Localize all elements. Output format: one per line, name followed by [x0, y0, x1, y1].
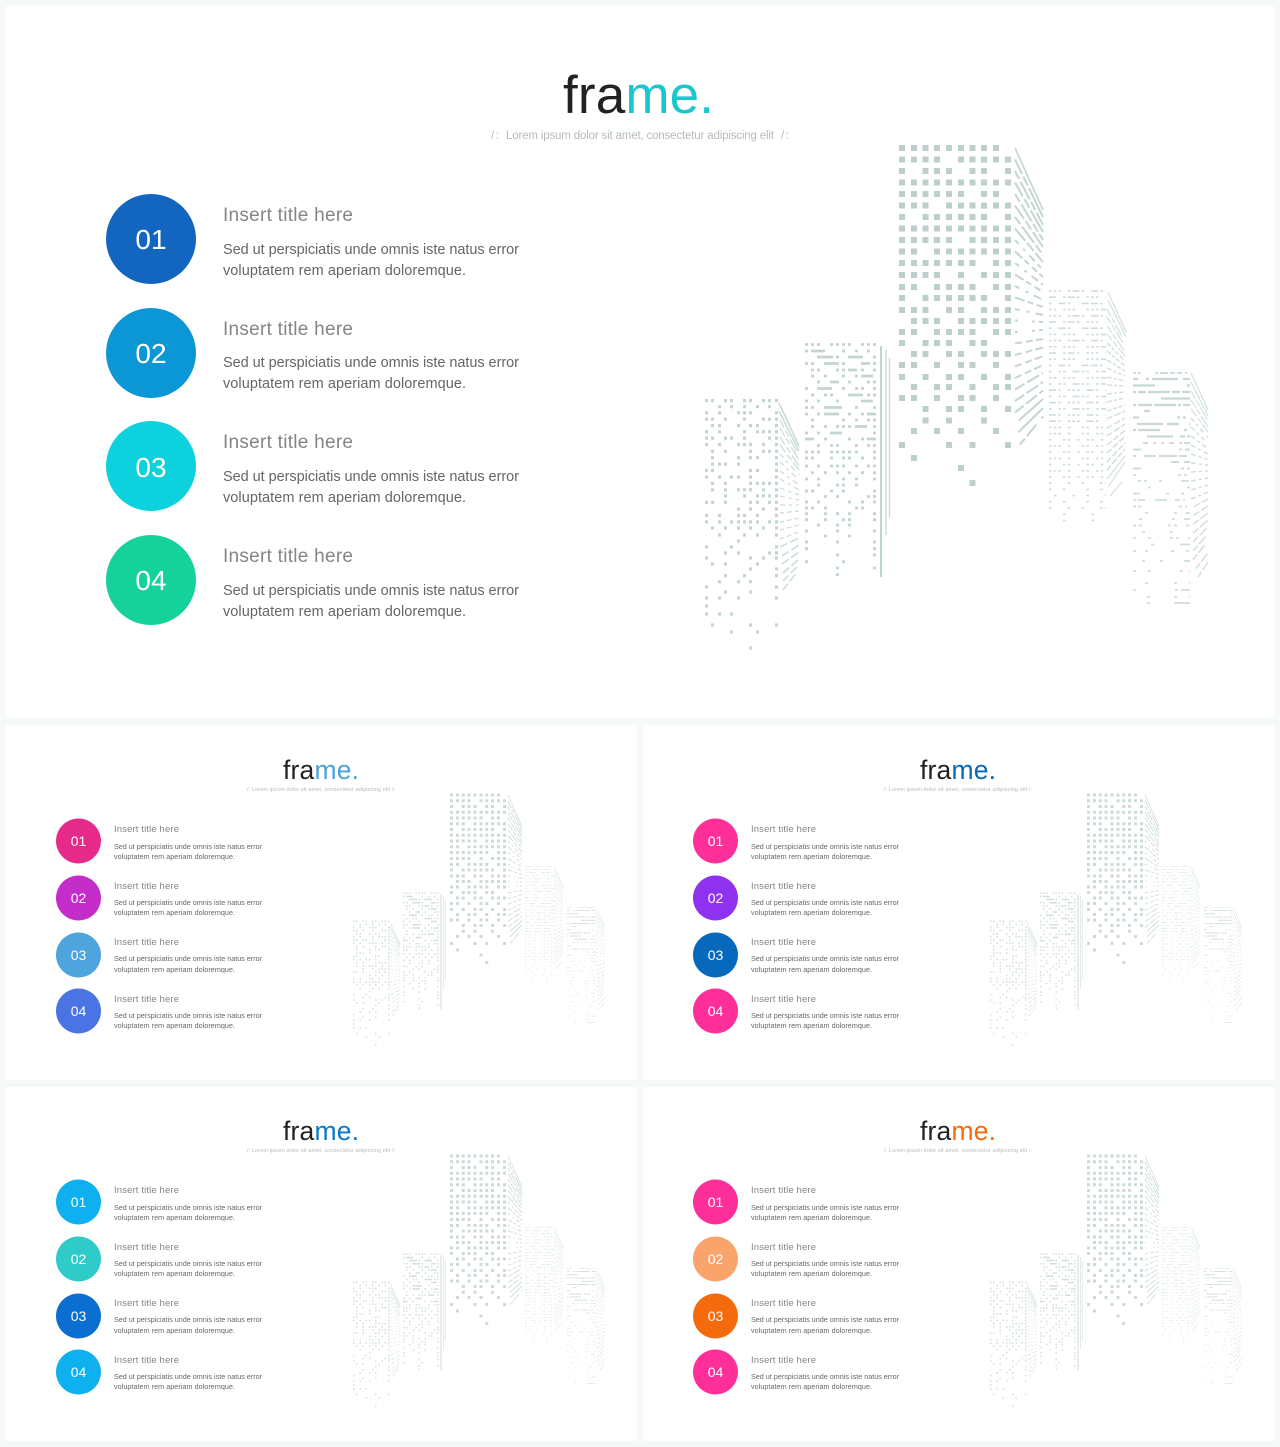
badges: 03	[708, 947, 723, 963]
item text: Insert title here	[114, 1185, 179, 1196]
item text: voluptatem rem aperiam doloremque.	[114, 852, 235, 861]
item text: voluptatem rem aperiam doloremque.	[114, 1269, 235, 1278]
subtitle: /: Lorem ipsum dolor sit amet, consectetur adipiscing elit /:	[247, 1148, 395, 1154]
item 04 text: Insert title here	[223, 546, 353, 567]
badges: 01	[71, 1194, 86, 1210]
panel: slide variant sky blue and teal	[6, 1087, 637, 1441]
item 02 text: voluptatem rem aperiam doloremque.	[223, 376, 466, 392]
badges	[693, 1180, 738, 1394]
item 01 text: Insert title here	[223, 205, 353, 226]
item 04 text: Sed ut perspiciatis unde omnis iste natus error	[223, 583, 519, 599]
item text: voluptatem rem aperiam doloremque.	[114, 1382, 235, 1391]
badges: 02	[71, 890, 86, 906]
item 03 text: Sed ut perspiciatis unde omnis iste natus error	[223, 469, 519, 485]
item text: voluptatem rem aperiam doloremque.	[751, 1269, 872, 1278]
panel: slide variant magenta and orange	[643, 1087, 1274, 1441]
title: frame.	[283, 755, 359, 785]
item text: Sed ut perspiciatis unde omnis iste natus error	[751, 898, 900, 907]
item text: Sed ut perspiciatis unde omnis iste natus error	[114, 954, 263, 963]
illustration: city skyline	[990, 795, 1242, 1045]
item text: Insert title here	[114, 824, 179, 835]
badges: 01	[708, 833, 723, 849]
item text: Insert title here	[751, 881, 816, 892]
item text: Insert title here	[114, 937, 179, 948]
item text	[751, 1185, 900, 1391]
illustration: dotted city skyline	[705, 148, 1208, 648]
item text: voluptatem rem aperiam doloremque.	[751, 1021, 872, 1030]
item text: Insert title here	[751, 1242, 816, 1253]
title: frame.	[920, 1116, 996, 1146]
badge 02	[106, 308, 196, 398]
item text: voluptatem rem aperiam doloremque.	[114, 1213, 235, 1222]
item text: Sed ut perspiciatis unde omnis iste natus error	[114, 898, 263, 907]
badges: 03	[708, 1308, 723, 1324]
panel: main slide	[6, 6, 1274, 718]
item text: Sed ut perspiciatis unde omnis iste natus error	[114, 1011, 263, 1020]
item text: Sed ut perspiciatis unde omnis iste natus error	[751, 842, 900, 851]
badges: 02	[708, 1251, 723, 1267]
item text	[751, 824, 900, 1030]
item text: Sed ut perspiciatis unde omnis iste natus error	[114, 1259, 263, 1268]
badges: 03	[71, 947, 86, 963]
item text: Sed ut perspiciatis unde omnis iste natus error	[751, 1011, 900, 1020]
badge 01	[106, 194, 196, 284]
subtitle: /: Lorem ipsum dolor sit amet, consectetur adipiscing elit /:	[884, 787, 1032, 793]
subtitle: Lorem ipsum dolor sit amet, consectetur adipiscing elit	[506, 130, 775, 142]
item text: voluptatem rem aperiam doloremque.	[114, 1326, 235, 1335]
list item 03	[106, 421, 519, 511]
item text: voluptatem rem aperiam doloremque.	[751, 908, 872, 917]
badges: 01	[708, 1194, 723, 1210]
item text: Sed ut perspiciatis unde omnis iste natus error	[114, 842, 263, 851]
item 02 text: Sed ut perspiciatis unde omnis iste natus error	[223, 355, 519, 371]
badge 01: 01	[135, 224, 167, 255]
badges	[56, 1180, 101, 1394]
panel: slide variant pink and blue	[6, 725, 637, 1080]
item text: voluptatem rem aperiam doloremque.	[114, 908, 235, 917]
illustration: city skyline	[990, 1156, 1242, 1406]
badge 03: 03	[135, 452, 167, 483]
item text: Insert title here	[114, 994, 179, 1005]
item 02 text: Insert title here	[223, 319, 353, 340]
item text: Sed ut perspiciatis unde omnis iste natus error	[751, 1203, 900, 1212]
badges: 04	[708, 1364, 723, 1380]
badge 04: 04	[135, 565, 167, 596]
title: frame.	[920, 755, 996, 785]
item text: Insert title here	[751, 994, 816, 1005]
badge 03	[106, 421, 196, 511]
item text: Insert title here	[751, 1298, 816, 1309]
item 02 text	[223, 319, 519, 392]
item text: Sed ut perspiciatis unde omnis iste natus error	[114, 1203, 263, 1212]
badge 02: 02	[135, 338, 167, 369]
item text	[114, 824, 263, 1030]
item 03 text: Insert title here	[223, 432, 353, 453]
badge 04	[106, 535, 196, 625]
title: frame.	[283, 1116, 359, 1146]
item text: voluptatem rem aperiam doloremque.	[751, 852, 872, 861]
item text: Insert title here	[751, 1185, 816, 1196]
badges	[693, 818, 738, 1034]
item 01 text: Sed ut perspiciatis unde omnis iste natus error	[223, 242, 519, 258]
item text: Sed ut perspiciatis unde omnis iste natus error	[751, 1259, 900, 1268]
list item 04	[106, 535, 519, 625]
subtitle: /:	[491, 130, 499, 142]
item text	[114, 1185, 263, 1391]
item text: Sed ut perspiciatis unde omnis iste natus error	[751, 1315, 900, 1324]
illustration: city skyline	[353, 795, 604, 1045]
panel: slide variant magenta and navy	[643, 725, 1274, 1080]
item 01 text: voluptatem rem aperiam doloremque.	[223, 263, 466, 279]
item text: voluptatem rem aperiam doloremque.	[114, 1021, 235, 1030]
badges: 02	[71, 1251, 86, 1267]
illustration: city skyline	[353, 1156, 604, 1406]
item text: Sed ut perspiciatis unde omnis iste natus error	[114, 1372, 263, 1381]
badges: 02	[708, 890, 723, 906]
item 03 text	[223, 432, 519, 506]
item text: Sed ut perspiciatis unde omnis iste natus error	[751, 954, 900, 963]
list item 01	[106, 194, 519, 284]
item text: voluptatem rem aperiam doloremque.	[751, 1326, 872, 1335]
item text: voluptatem rem aperiam doloremque.	[751, 1382, 872, 1391]
subtitle: /: Lorem ipsum dolor sit amet, consectetur adipiscing elit /:	[884, 1148, 1032, 1154]
item 01 text	[223, 205, 519, 279]
item text: Insert title here	[114, 1242, 179, 1253]
badges: 04	[71, 1364, 86, 1380]
badges: 04	[71, 1003, 86, 1019]
item text: Insert title here	[751, 1355, 816, 1366]
item text: Insert title here	[114, 881, 179, 892]
item text: voluptatem rem aperiam doloremque.	[751, 965, 872, 974]
badges	[56, 818, 101, 1034]
item text: Insert title here	[751, 824, 816, 835]
item text: Insert title here	[751, 937, 816, 948]
list item 02	[106, 308, 519, 398]
item 04 text	[223, 546, 519, 620]
item text: voluptatem rem aperiam doloremque.	[751, 1213, 872, 1222]
item text: voluptatem rem aperiam doloremque.	[114, 965, 235, 974]
item 04 text: voluptatem rem aperiam doloremque.	[223, 604, 466, 620]
subtitle: /: Lorem ipsum dolor sit amet, consectetur adipiscing elit /:	[247, 787, 395, 793]
badges: 03	[71, 1308, 86, 1324]
item text: Sed ut perspiciatis unde omnis iste natus error	[114, 1315, 263, 1324]
badges: 04	[708, 1003, 723, 1019]
badges: 01	[71, 833, 86, 849]
item text: Sed ut perspiciatis unde omnis iste natus error	[751, 1372, 900, 1381]
item 03 text: voluptatem rem aperiam doloremque.	[223, 490, 466, 506]
item text: Insert title here	[114, 1298, 179, 1309]
subtitle: /:	[781, 130, 789, 142]
item text: Insert title here	[114, 1355, 179, 1366]
title: frame.	[563, 66, 714, 125]
